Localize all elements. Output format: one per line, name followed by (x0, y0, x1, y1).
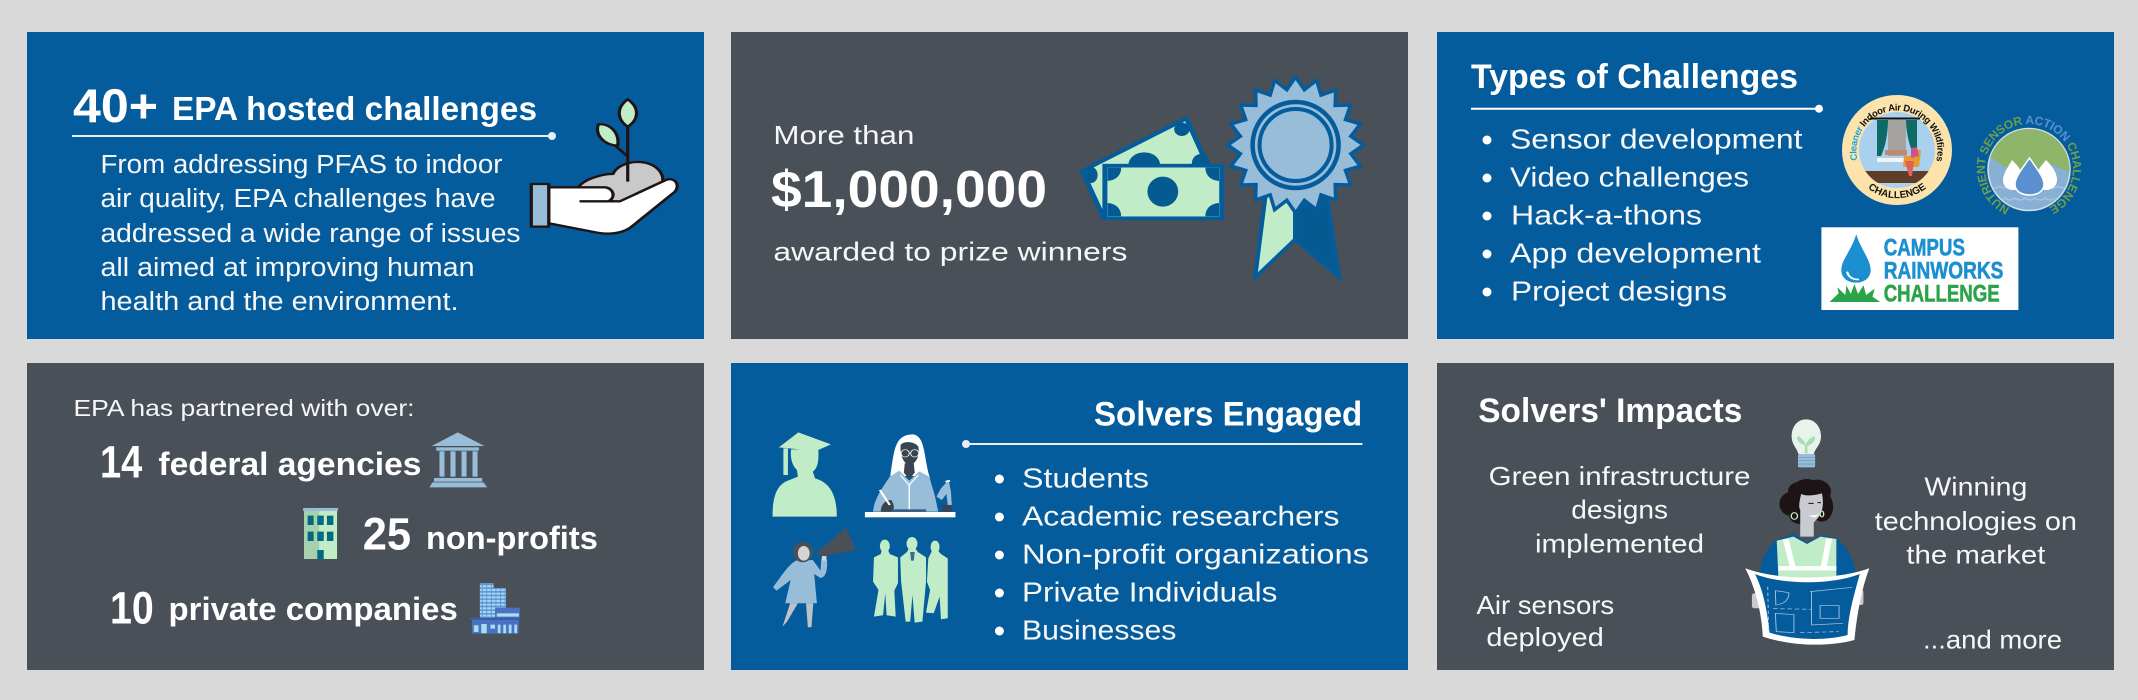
list: challenge types (1482, 123, 1803, 306)
text: and more: ...and more (1923, 624, 2062, 654)
stat: 25 non-profits (363, 508, 598, 559)
text: green infrastructure: implemented (1535, 528, 1704, 558)
icon: graduate silhouette (773, 432, 837, 517)
heading: Solvers Engaged: Solvers Engaged (1094, 395, 1362, 433)
text block: challenges description: health and the environment. (100, 288, 458, 316)
text: awarded to prize winners: awarded to prize winners (773, 237, 1127, 267)
text: winning technologies: technologies on (1875, 506, 2077, 536)
logo: Cleaner Indoor Air During Wildfires Challenge (1842, 95, 1952, 205)
list: solver types: Businesses (1022, 614, 1176, 645)
list: challenge types: App development (1510, 237, 1761, 268)
logo: Campus RainWorks Challenge: RAINWORKS (1884, 258, 2003, 285)
list: solver types: Non-profit organizations (1022, 538, 1369, 569)
logo: Campus RainWorks Challenge: CAMPUS (1884, 235, 1965, 262)
icon: group of business people (873, 537, 948, 623)
text block: challenges description: air quality, EPA challenges have (100, 185, 496, 213)
icon: dollar bills (1082, 118, 1222, 218)
text: winning technologies: the market (1906, 539, 2046, 569)
icon: hand holding seedling (531, 99, 677, 234)
heading: 40+ EPA hosted challenges: EPA hosted challenges (172, 90, 537, 127)
text: EPA has partnered with over: EPA has partnered with over: (74, 395, 414, 421)
panel: EPA hosted challenges (27, 32, 704, 339)
panel: solvers engaged (731, 363, 1408, 670)
text: green infrastructure: Green infrastructure (1489, 461, 1750, 491)
list: challenge types: Sensor development (1510, 123, 1803, 154)
list: solver types (995, 462, 1369, 645)
heading: 40+ EPA hosted challenges: 40+ (73, 79, 158, 132)
text block: challenges description: From addressing PFAS to indoor (100, 151, 503, 179)
logo: Nutrient Sensor Action Challenge: NUTRIENT SENSOR ACTION CHALLENGE (1976, 116, 2082, 214)
text: green infrastructure: designs (1571, 494, 1668, 524)
text block: challenges description (100, 151, 520, 316)
text block: challenges description: all aimed at improving human (100, 254, 474, 282)
panel: solvers' impacts (1437, 363, 2114, 670)
stat: 14 federal agencies (100, 436, 421, 487)
icon: person holding blueprint (1745, 479, 1869, 645)
text: air sensors deployed: deployed (1486, 622, 1604, 652)
text: winning technologies (1875, 472, 2077, 569)
stat: 14 federal agencies: 14 (100, 436, 142, 487)
list: challenge types: Project designs (1511, 275, 1727, 306)
stat: 10 private companies: 10 (110, 582, 154, 633)
icon: light bulb (1792, 419, 1821, 467)
list: challenge types: Hack-a-thons (1511, 199, 1702, 230)
stat: 10 private companies (110, 582, 458, 633)
logo: Campus RainWorks Challenge: CHALLENGE (1884, 281, 2000, 308)
icon: woman with megaphone (773, 528, 856, 627)
icon: award ribbon (1228, 77, 1364, 277)
list: challenge types: Video challenges (1510, 161, 1749, 192)
logo: Cleaner Indoor Air During Wildfires Challenge: CHALLENGE (1869, 182, 1926, 198)
list: solver types: Academic researchers (1022, 500, 1340, 531)
text: winning technologies: Winning (1924, 472, 2027, 502)
text: air sensors deployed: Air sensors (1476, 590, 1614, 620)
heading: 40+ EPA hosted challenges (73, 79, 537, 132)
heading: Solvers' Impacts: Solvers' Impacts (1478, 392, 1742, 430)
heading: Types of Challenges: Types of Challenges (1471, 58, 1798, 96)
icon: researcher with microscope (865, 434, 955, 517)
icon: government building (429, 432, 487, 487)
stat: 14 federal agencies: federal agencies (158, 446, 421, 482)
panel: types of challenges (1437, 32, 2114, 339)
icon: office building (303, 508, 338, 559)
text: air sensors deployed (1476, 590, 1614, 652)
heading: $1,000,000: $1,000,000 (771, 161, 1047, 219)
text: More than: More than (773, 120, 914, 150)
panel: prize money (731, 32, 1408, 339)
logo: Cleaner Indoor Air During Wildfires Challenge: Cleaner Indoor Air During Wildfires (1850, 104, 1944, 162)
list: solver types: Private Individuals (1022, 576, 1277, 607)
icon: corporate towers (470, 583, 520, 634)
text: green infrastructure (1489, 461, 1750, 558)
panel: partners (27, 363, 704, 670)
list: solver types: Students (1022, 462, 1149, 493)
text block: challenges description: addressed a wide range of issues (100, 220, 520, 248)
stat: 25 non-profits: 25 (363, 508, 411, 559)
stat: 10 private companies: private companies (168, 591, 458, 627)
stat: 25 non-profits: non-profits (426, 520, 598, 556)
logo: Campus RainWorks Challenge (1821, 227, 2018, 310)
